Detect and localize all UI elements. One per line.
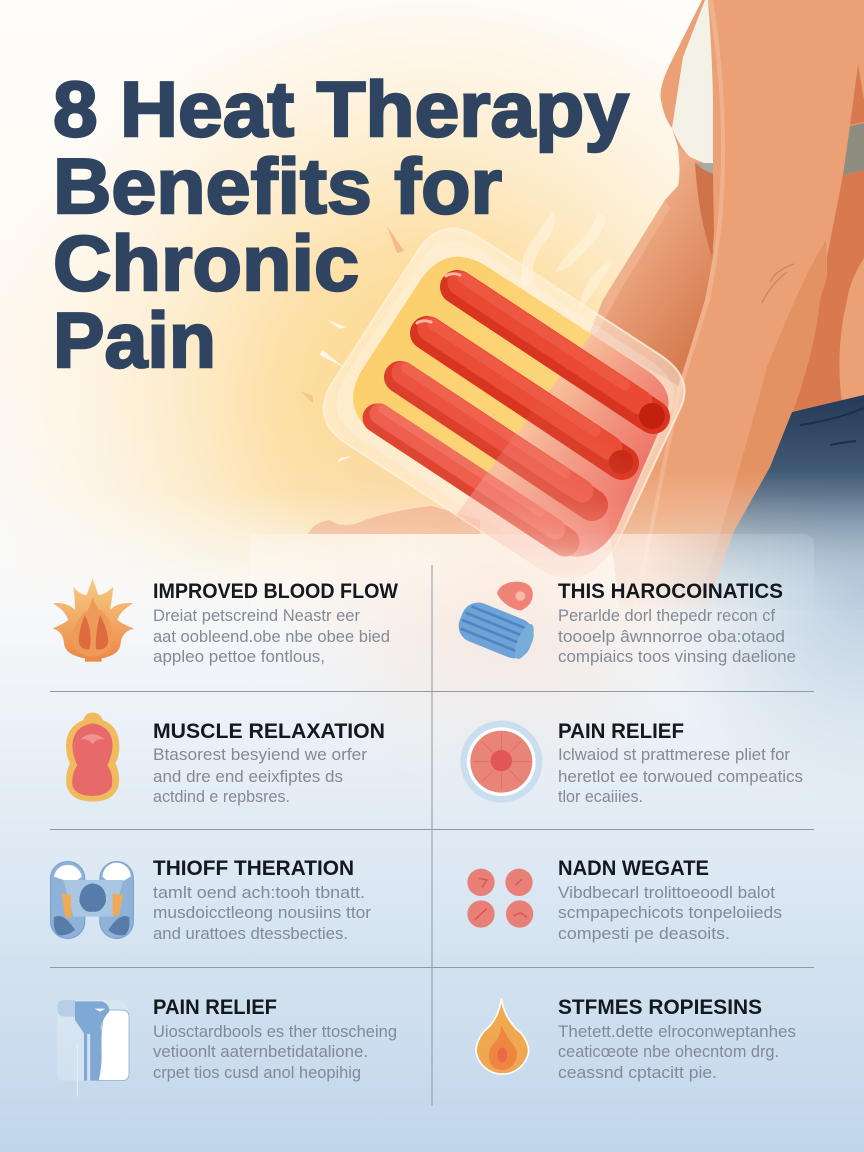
description: aat oobleend.obe nbe obee bied — [153, 627, 390, 646]
description: musdoicctleong nousiins ttor — [153, 903, 371, 922]
jeans — [706, 395, 864, 610]
description: toooelp âwnnorroe oba:otaod — [558, 627, 785, 646]
forearm shaded band — [720, 240, 827, 542]
description: Iclwaiod st prattmerese pliet for — [558, 745, 790, 764]
icon: joint — [51, 862, 133, 938]
forearm — [682, 310, 707, 390]
description: and dre end eeixfiptes ds — [153, 767, 343, 786]
description: appleo pettoe fontlous, — [153, 647, 325, 666]
description: tamlt oend ach:tooh tbnatt. — [153, 883, 365, 902]
content panel — [250, 534, 814, 604]
description: vetioonlt aaternbetidatalione. — [153, 1042, 368, 1061]
description: heretlot ee torwoued compeatics — [558, 767, 803, 786]
title: Benefits for — [53, 142, 502, 230]
description — [153, 1022, 397, 1082]
heading: THIOFF THERATION — [153, 857, 354, 880]
description: Dreiat petscreind Neastr eer — [153, 606, 360, 625]
heading: PAIN RELIEF — [153, 996, 277, 1019]
description: ceassnd cptacitt pie. — [558, 1063, 717, 1082]
benefit: wellbeing — [467, 857, 782, 943]
tube 2 — [417, 321, 633, 474]
tube 4 — [377, 409, 565, 542]
pink veil — [456, 413, 630, 577]
arm crease — [695, 163, 714, 257]
description — [153, 745, 367, 806]
icon: flame drop — [476, 998, 529, 1074]
title — [53, 65, 629, 384]
strap — [843, 123, 864, 175]
description: actdind e repbsres. — [153, 787, 290, 806]
grid dividers — [50, 565, 814, 1106]
heading: MUSCLE RELAXATION — [153, 720, 385, 743]
right torso dark — [793, 65, 864, 411]
tank top — [672, 0, 713, 167]
icon: blue roll and pink blob — [454, 582, 539, 663]
benefit: stiffness — [51, 857, 371, 943]
steam wisps — [521, 212, 612, 312]
description: ceaticœote nbe ohecntom drg. — [558, 1042, 779, 1061]
description: Btasorest besyiend we orfer — [153, 745, 367, 764]
benefit: improved blood flow — [53, 578, 398, 666]
description: and urattoes dtessbecties. — [153, 924, 348, 943]
tube 3 — [400, 368, 592, 505]
heading: STFMES ROPIESINS — [558, 996, 762, 1019]
skin base — [585, 0, 864, 610]
benefit: pain relief — [460, 720, 803, 806]
description — [153, 606, 390, 666]
heat pack — [322, 228, 686, 578]
description — [153, 883, 371, 943]
description: compesti pe deasoits. — [558, 924, 730, 943]
skin marks — [762, 264, 794, 303]
description: Vibdbecarl trolittoeoodl balot — [558, 883, 775, 902]
illustration: body behind heat pack — [300, 0, 864, 610]
description: crpet tios cusd anol heopihig — [153, 1063, 361, 1082]
description: scmpapechicots tonpeloiieds — [558, 903, 782, 922]
icon: flame crown — [53, 578, 134, 662]
icon: four red circles — [467, 869, 533, 928]
description: Thetett.dette elroconweptanhes — [558, 1022, 796, 1041]
description: tlor ecaiiies. — [558, 787, 643, 806]
arm light edge — [590, 200, 670, 335]
title: 8 Heat Therapy — [53, 65, 629, 153]
title: Chronic — [53, 219, 359, 307]
tank hem — [695, 163, 713, 174]
icon: muscle — [66, 713, 119, 802]
benefit: pain relief two — [57, 996, 397, 1097]
benefit: stiffness relief — [476, 996, 796, 1082]
heading: PAIN RELIEF — [558, 720, 684, 743]
description: Uiosctardbools es ther ttoscheing — [153, 1022, 397, 1041]
heading: NADN WEGATE — [558, 857, 709, 880]
benefit: thermal roll — [454, 580, 796, 666]
icon: target circle — [460, 721, 542, 803]
tube 1 — [446, 274, 665, 429]
heat rays — [300, 226, 404, 462]
description: compiaics toos vinsing daelione — [558, 647, 796, 666]
title: Pain — [53, 296, 216, 384]
arm shading — [605, 148, 714, 386]
lower body lump — [308, 506, 480, 534]
description — [558, 883, 782, 943]
icon: blue joint bar — [57, 1000, 129, 1097]
description — [558, 606, 796, 666]
pack shell — [322, 228, 686, 557]
heading: THIS HAROCOINATICS — [558, 580, 783, 603]
forearm light strip — [648, 0, 725, 534]
description — [558, 745, 803, 806]
heading: IMPROVED BLOOD FLOW — [153, 580, 398, 603]
description: Perarlde dorl thepedr recon cf — [558, 606, 775, 625]
description — [558, 1022, 796, 1082]
benefit: muscle relaxation — [66, 713, 385, 806]
